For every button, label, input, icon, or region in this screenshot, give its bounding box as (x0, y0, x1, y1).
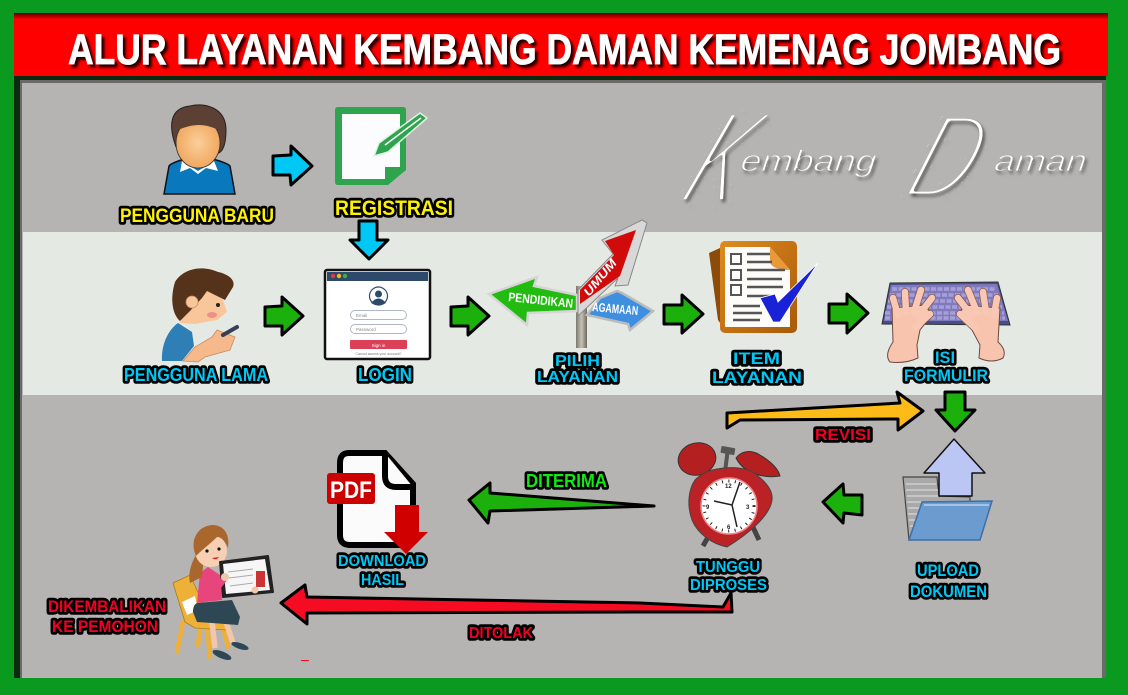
label: upload documents: UPLOAD (917, 561, 979, 580)
wordmark: Kembang Daman (655, 83, 1093, 232)
icon: keyboard and hands (882, 282, 1010, 362)
arrow: form to upload (936, 392, 975, 431)
arrow: items to form (829, 294, 868, 333)
label: revision: REVISI (815, 427, 871, 444)
label: registration: REGISTRASI (335, 197, 453, 220)
icon: checklist (709, 241, 818, 333)
wordmark: Kembang Daman: aman (990, 144, 1093, 178)
icon: woman with tablet on chair (173, 525, 273, 662)
label: fill form (904, 348, 988, 385)
icon: signpost of service choices (489, 220, 653, 348)
label: download result (338, 553, 426, 589)
label: choose service: PILIH (555, 353, 600, 370)
icon: alarm clock: 9 (706, 505, 710, 511)
label: upload documents (910, 561, 987, 601)
label: choose service: LAYANAN (537, 369, 618, 386)
label: fill form: FORMULIR (904, 366, 988, 385)
label: service items: LAYANAN (712, 368, 802, 387)
arrow: upload to waiting (823, 484, 862, 523)
red sign: UMUM (581, 255, 620, 299)
icon: PDF download: PDF (330, 477, 372, 504)
blue sign (587, 291, 653, 330)
label: choose service (537, 353, 618, 386)
label: returned to applicant: KE PEMOHON (52, 617, 158, 636)
light band: returning user row (23, 232, 1102, 395)
icon: alarm clock: 6 (727, 525, 731, 531)
icon: login window: Password (356, 327, 376, 332)
wordmark: Kembang Daman: embang (736, 144, 883, 178)
arrow: revision path (727, 392, 923, 430)
label: wait for processing: TUNGGU (696, 559, 760, 576)
icon: alarm clock (675, 439, 780, 547)
icon: login window: Cannot access your account? (355, 352, 402, 356)
label: returning user: PENGGUNA LAMA (124, 365, 268, 385)
label: new user: PENGGUNA BARU (120, 206, 274, 227)
label: upload documents: DOKUMEN (910, 582, 987, 601)
arrow: accepted (469, 483, 654, 523)
arrow: registration to login (350, 221, 388, 259)
green sign: PENDIDIKAN (508, 290, 574, 311)
label: accepted: DITERIMA (526, 471, 607, 491)
arrow: new user to registration (273, 146, 312, 185)
arrow: login to service choice (451, 297, 489, 335)
icon: upload folder (903, 439, 992, 540)
label: login: LOGIN (358, 365, 412, 385)
label: fill form: ISI (935, 348, 955, 367)
icon: login window (325, 270, 430, 359)
icon: alarm clock: 3 (746, 505, 750, 511)
label: download result: HASIL (361, 572, 404, 589)
label: returned to applicant: DIKEMBALIKAN (48, 597, 166, 616)
icon: registration form (335, 107, 427, 185)
blue sign: AGAMAAN (592, 300, 639, 318)
label: rejected: DITOLAK (469, 625, 533, 642)
wordmark: Kembang Daman: K (655, 83, 796, 232)
icon: login window: Sign in (372, 343, 386, 348)
label: service items: ITEM (733, 349, 780, 368)
label: wait for processing: DIPROSES (690, 577, 767, 594)
icon: returning user with phone (162, 268, 237, 362)
arrow: choice to service items (664, 295, 703, 333)
icon: login window: Email (356, 313, 367, 318)
label: wait for processing (690, 559, 767, 594)
icon: PDF download (327, 453, 428, 554)
label: service items (712, 349, 802, 387)
icon: new user (164, 105, 235, 194)
arrow: rejected (281, 585, 732, 624)
label: download result: DOWNLOAD (338, 553, 426, 570)
icon: alarm clock: 12 (725, 484, 732, 490)
green sign (489, 277, 577, 325)
red sign (578, 220, 647, 316)
label: returned to applicant (48, 597, 166, 636)
arrow: returning user to login (265, 297, 303, 335)
title banner (14, 13, 1108, 76)
wordmark: Kembang Daman: D (884, 90, 1016, 223)
